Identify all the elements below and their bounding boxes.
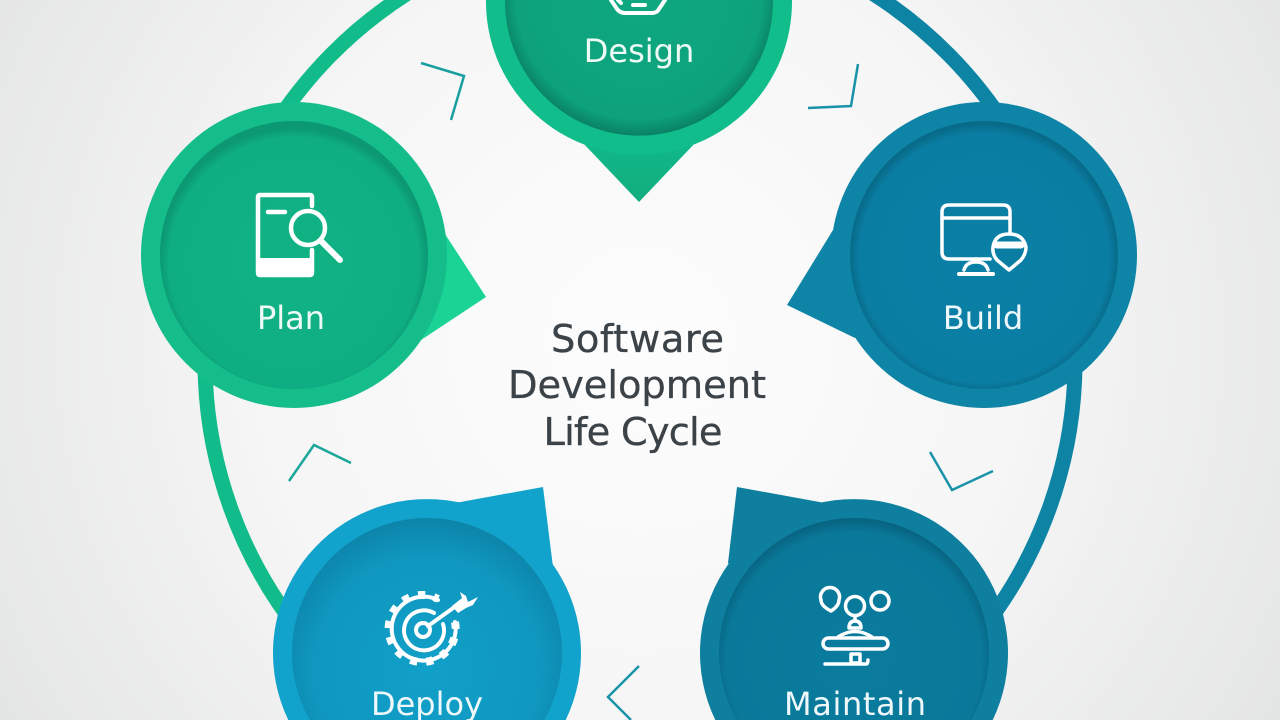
title: software development life cycle — [508, 317, 766, 455]
node: maintain — [700, 487, 1008, 720]
title: software development life cycle: Software — [551, 317, 724, 362]
icon: monitor with badge — [942, 205, 1026, 274]
label: plan: Plan — [257, 299, 325, 337]
title: software development life cycle: Development — [508, 363, 766, 408]
chevron arrow: build to maintain — [930, 452, 993, 490]
title: software development life cycle: Life Cycle — [544, 410, 722, 455]
connecting arc: design to build to maintain — [864, 0, 1075, 636]
chevron arrow: maintain to deploy — [608, 666, 639, 720]
connecting arc: deploy to plan to design — [205, 0, 416, 636]
chevron arrow: plan to design — [421, 63, 464, 120]
icon: gears over platform — [820, 587, 889, 664]
label: design: Design — [584, 32, 694, 70]
chevron arrow: design to build — [808, 64, 858, 108]
label: build: Build — [943, 299, 1023, 337]
node: deploy — [273, 487, 581, 720]
node: plan — [141, 102, 486, 408]
icon: gear target with wrench arrow — [389, 592, 478, 662]
chevron arrow: deploy to plan — [289, 445, 351, 481]
icon: document and magnifier — [256, 195, 340, 276]
node: build — [787, 102, 1137, 408]
node: design — [486, 0, 792, 202]
icon: design tool — [611, 0, 665, 13]
